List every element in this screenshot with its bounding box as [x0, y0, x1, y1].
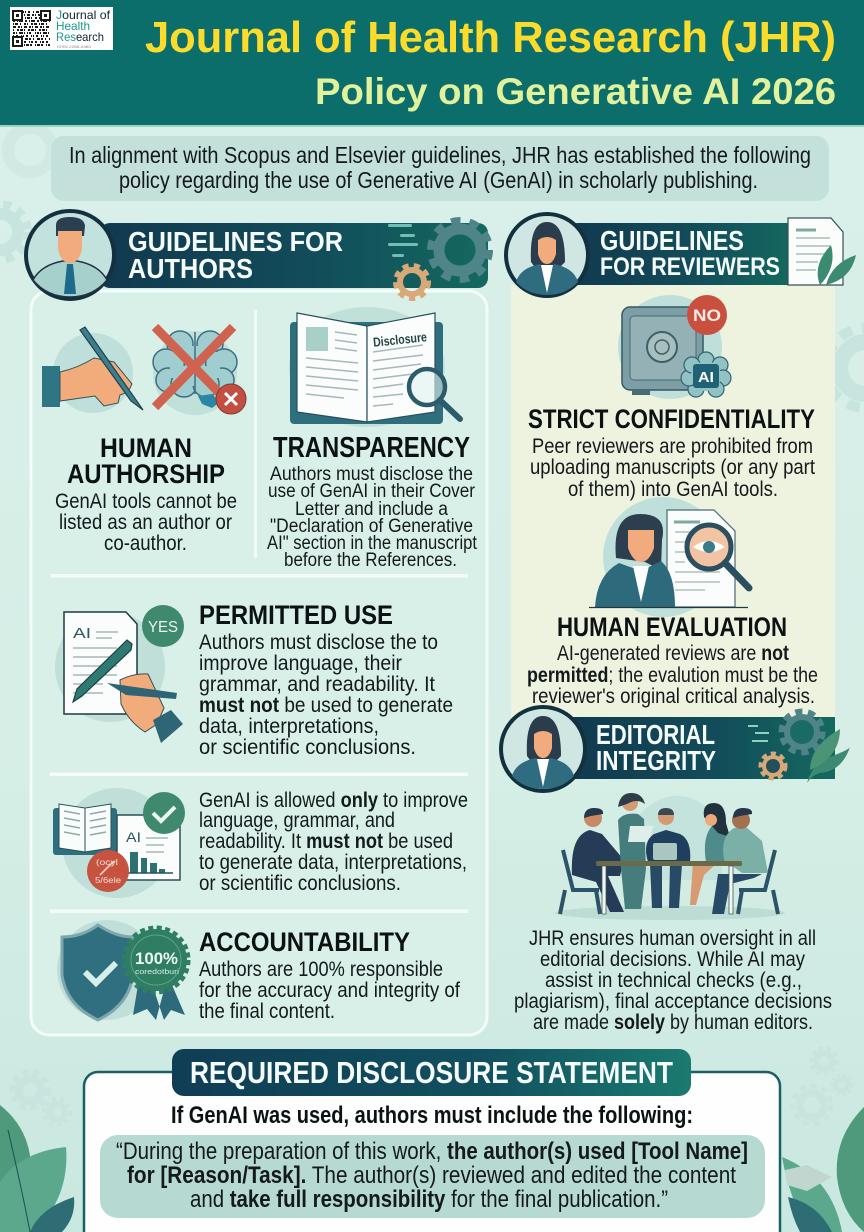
body text: editorial integrity: are made solely by human editors. [533, 1011, 813, 1034]
icon: shield with medal: coredotburi [135, 969, 180, 976]
icon: document [788, 218, 843, 285]
body text: grammar, and readability. It [199, 673, 435, 696]
body text: language, grammar, and [199, 809, 395, 832]
icon: book, chart and check badge: 5/6ele [95, 876, 122, 885]
journal logo and QR code: Health [56, 19, 90, 33]
body text: Authors must disclose the [270, 464, 473, 485]
panel: required disclosure statement [84, 1049, 780, 1232]
block: strict confidentiality [528, 295, 815, 501]
body text: co-author. [104, 532, 187, 555]
header band [0, 0, 864, 127]
body text: or scientific conclusions. [199, 872, 401, 895]
icon: crossed-out brain [153, 327, 246, 415]
bottom-right leaves [782, 1107, 864, 1232]
heading: editorial integrity: EDITORIAL [596, 719, 715, 750]
body text [199, 789, 468, 895]
body text: to generate data, interpretations, [199, 851, 467, 874]
label: section heading [172, 1049, 691, 1096]
icon: book, chart and check badge: AI [126, 829, 141, 845]
body text: readability. It must not be used [199, 830, 453, 853]
body text: AI-generated reviews are not [557, 642, 789, 665]
heading: guidelines for reviewers: GUIDELINES [600, 225, 744, 256]
icon: gears and leaves [748, 712, 850, 783]
avatar: female reviewer [506, 214, 588, 296]
journal logo and QR code: ISSN 2286-0460 [57, 44, 92, 49]
heading: guidelines for authors: GUIDELINES FOR [128, 226, 343, 257]
heading: HUMAN EVALUATION [557, 612, 787, 642]
block: accountability [57, 920, 460, 1023]
icon: AI document with pen and YES badge [55, 605, 184, 743]
icon: reviewer with document and magnifier [589, 497, 749, 617]
body text: Letter and include a [295, 499, 448, 520]
body text: Authors are 100% responsible [199, 958, 443, 981]
icon: safe with NO badge and AI brain: AI [698, 369, 714, 386]
body text: use of GenAI in their Cover [268, 481, 476, 502]
icon: small gear [396, 266, 428, 298]
icon: shield with medal: 100% [135, 949, 178, 968]
body text: permitted; the evalution must be the [527, 664, 818, 687]
body text: GenAI tools cannot be [55, 490, 237, 513]
heading: TRANSPARENCY [273, 432, 470, 464]
illustration: editorial meeting [555, 793, 785, 920]
heading: ACCOUNTABILITY [199, 927, 410, 957]
body text: editorial integrity: editorial decisions. While AI may [540, 948, 805, 971]
icon: hand writing with pen [42, 327, 143, 413]
block: transparency [267, 307, 478, 571]
bottom-left leaves [0, 1105, 74, 1232]
avatar: female editor [501, 707, 585, 791]
heading: HUMAN [100, 433, 192, 463]
body text: editorial integrity: assist in technical checks (e.g., [545, 969, 802, 992]
intro text box [51, 136, 829, 201]
body text [199, 631, 453, 759]
body text: editorial integrity: JHR ensures human oversight in all [529, 927, 816, 950]
panel: guidelines for authors [31, 291, 487, 1035]
avatar: male author [26, 211, 114, 299]
body text: Peer reviewers are prohibited from [532, 435, 813, 458]
body text: before the References. [284, 550, 457, 571]
icon: safe with NO badge and AI brain: NO [693, 306, 721, 325]
body text: must not be used to generate [199, 694, 453, 717]
icon: book, chart and check badge [53, 788, 185, 898]
quoted statement: for [Reason/Task]. The author(s) reviewed and edited the content [127, 1162, 736, 1189]
body text [527, 642, 818, 708]
body text [55, 490, 237, 555]
body text: AI" section in the manuscript [267, 533, 478, 554]
body text: Authors must disclose the to [199, 631, 438, 654]
icon: AI document with pen and YES badge: AI [73, 625, 91, 642]
body text [267, 464, 478, 571]
body text: for the accuracy and integrity of [199, 979, 460, 1002]
body text [530, 435, 815, 501]
icon: open book with magnifier [289, 307, 460, 427]
body text: of them) into GenAI tools. [568, 478, 778, 501]
body text: reviewer's original critical analysis. [532, 685, 815, 708]
body text [199, 958, 460, 1023]
heading: guidelines for authors: AUTHORS [128, 253, 253, 284]
quoted statement: “During the preparation of this work, the author(s) used [Tool Name] [116, 1138, 748, 1165]
body text: improve language, their [199, 652, 402, 675]
block: allowed language use [53, 788, 468, 898]
heading: guidelines for reviewers [570, 218, 856, 285]
label: section heading: REQUIRED DISCLOSURE STATEMENT [190, 1055, 673, 1090]
heading: guidelines for reviewers: FOR REVIEWERS [600, 253, 780, 281]
body text: uploading manuscripts (or any part [530, 456, 815, 479]
icon: leaves [818, 245, 856, 285]
icon: book, chart and check badge: (ocyl [96, 858, 118, 867]
icon: safe with NO badge and AI brain [618, 295, 731, 399]
icon: AI document with pen and YES badge: YES [148, 619, 178, 636]
title: Journal of Health Research (JHR) [145, 13, 836, 62]
body text: editorial integrity [514, 927, 832, 1034]
subtitle: Policy on Generative AI 2026 [315, 71, 836, 112]
icon: open book with magnifier: Disclosure [372, 329, 428, 350]
body text: the final content. [199, 1000, 335, 1023]
body text: GenAI is allowed only to improve [199, 789, 468, 812]
heading: guidelines for authors [100, 222, 488, 298]
journal logo and QR code [10, 7, 113, 50]
icon: shield with medal [57, 920, 188, 1020]
icon: large gear [432, 222, 488, 278]
journal logo and QR code: Journal of [56, 8, 111, 22]
heading: PERMITTED USE [199, 600, 393, 630]
body text: editorial integrity: plagiarism), final acceptance decisions [514, 990, 832, 1013]
body text: "Declaration of Generative [270, 516, 473, 537]
block: permitted use [55, 600, 453, 759]
instruction line: If GenAI was used, authors must include the following: [171, 1102, 693, 1129]
panel: guidelines for reviewers background [511, 285, 835, 720]
quoted statement [100, 1135, 765, 1218]
block: human authorship [42, 327, 246, 555]
heading: editorial integrity [570, 712, 850, 783]
body text: or scientific conclusions. [199, 736, 416, 759]
heading line 2: AUTHORSHIP [67, 459, 225, 489]
body text: listed as an author or [59, 511, 232, 534]
block: human evaluation [527, 497, 818, 708]
body text: data, interpretations, [199, 715, 379, 738]
journal logo and QR code: Research [56, 30, 104, 44]
heading: editorial integrity: INTEGRITY [596, 745, 716, 776]
intro text box: policy regarding the use of Generative AI (GenAI) in scholarly publishing. [119, 167, 758, 193]
quoted statement: and take full responsibility for the final publication.” [190, 1186, 668, 1213]
